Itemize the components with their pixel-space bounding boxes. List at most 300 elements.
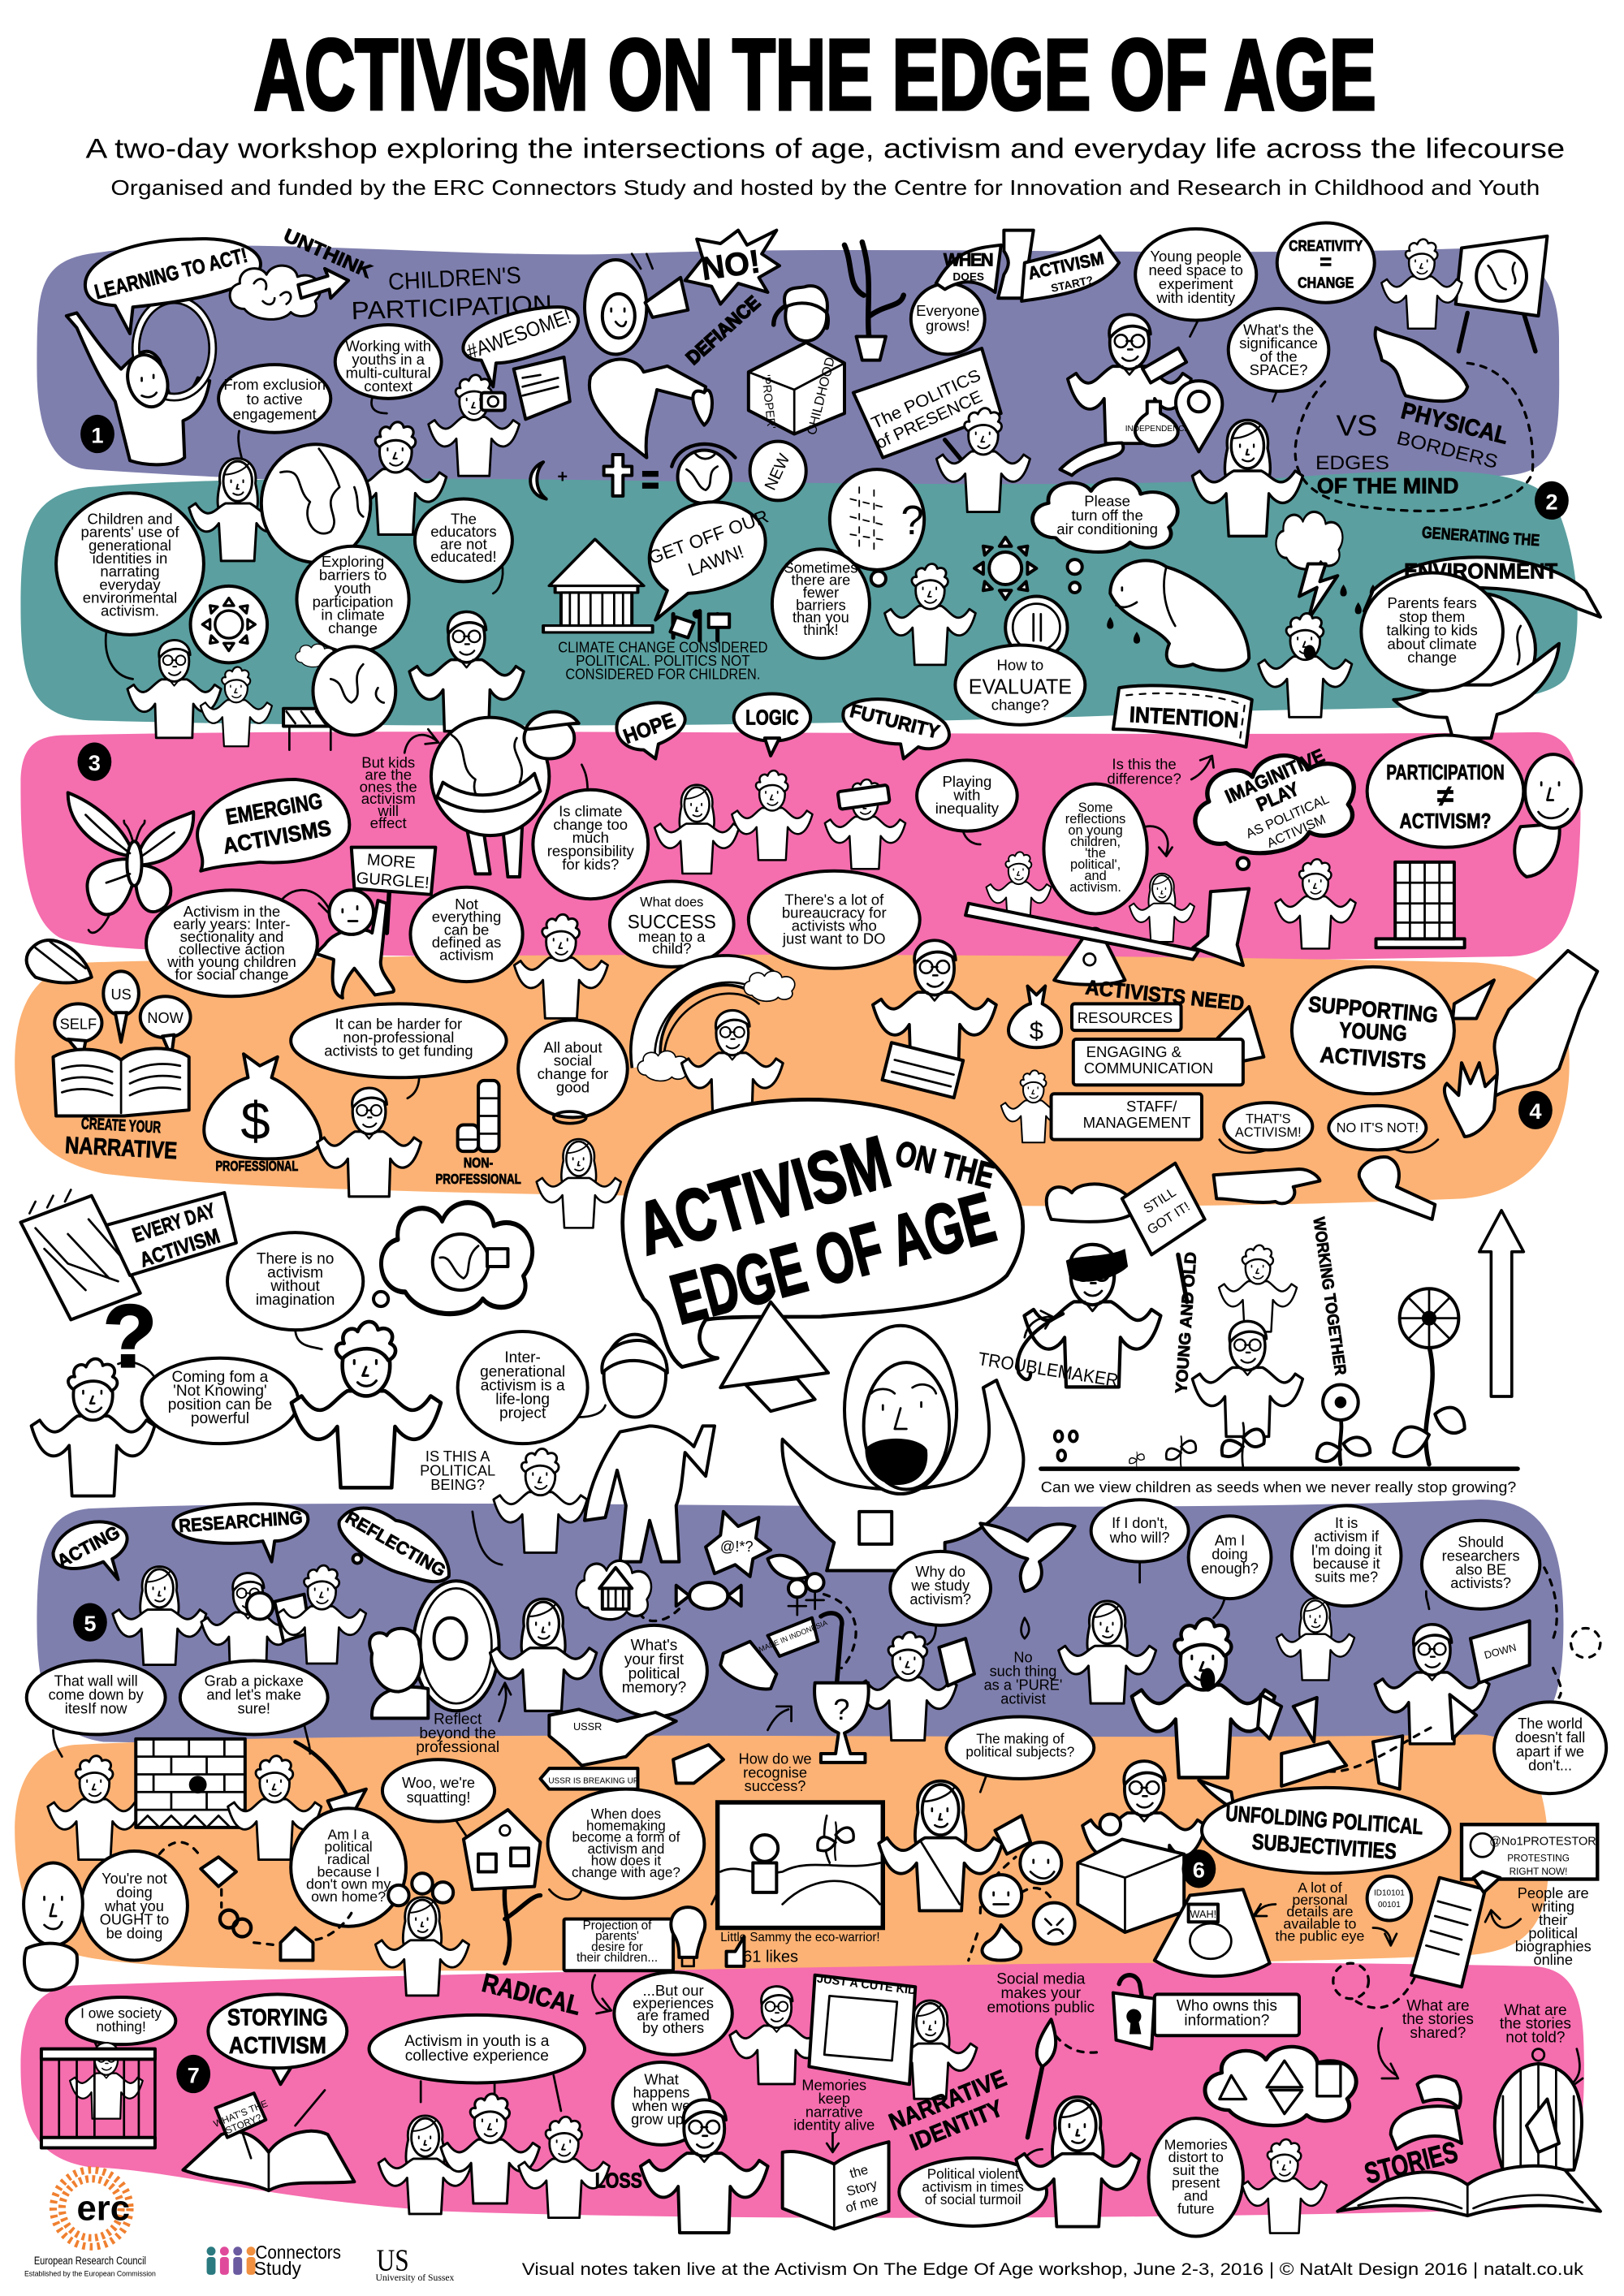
text: lot of personal details: details are [1286, 1904, 1354, 1920]
bubble: when does homemaking: When does [591, 1806, 661, 1822]
icon: money bag [204, 1054, 321, 1159]
bubble: is climate change too much: for kids? [562, 856, 619, 873]
bubble: sometimes fewer barriers: think! [803, 622, 839, 638]
bubble: creativity = change: CHANGE [1298, 275, 1354, 291]
text: is this a political being: BEING? [430, 1477, 485, 1493]
box: engaging and communication: COMMUNICATION [1084, 1060, 1213, 1077]
box: engaging and communication [1073, 1039, 1243, 1085]
bubble: you're not doing: what you [104, 1898, 164, 1914]
bubble: first political memory: your first [624, 1651, 685, 1668]
bubble: children and parents: activism. [101, 602, 159, 619]
logo: european research council: Established by the European Commission [24, 2270, 156, 2278]
bubble: parents fears: talking to kids [1386, 622, 1478, 639]
bubble: educators [415, 499, 512, 593]
picture frame: just a cute kid: JUST A CUTE KID [816, 1973, 917, 1998]
broken globe pieces [1258, 1694, 1476, 1789]
bubble: is climate change too much [533, 765, 648, 899]
bubble: i owe society nothing [67, 1997, 175, 2061]
bubble: playing with inequality: Playing [943, 773, 991, 790]
figure: worried man [1259, 613, 1352, 717]
icon: pointing hand [1214, 1169, 1320, 1203]
bubble: inter-generational: activism is a [481, 1377, 565, 1394]
text: troublemaker [977, 1311, 1120, 1391]
icon: small money bag: $ [1030, 1016, 1043, 1045]
bubble: what happens when we grow up: happens [633, 2085, 689, 2101]
icons: sneaker and tag [720, 1618, 829, 1689]
icon: the story of me book [783, 2133, 889, 2229]
bubble: some reflections: political', [1070, 857, 1121, 872]
bubble: i owe society nothing: nothing! [96, 2018, 146, 2035]
bubble: young people: Young people [1150, 248, 1242, 265]
bubble: should researchers: also BE [1455, 1561, 1506, 1577]
box: resources: RESOURCES [1078, 1009, 1173, 1026]
text: but kids are the ones: activism [361, 790, 416, 807]
icon: house with tree legs [464, 1810, 540, 1963]
figure: older woman with curls [375, 1873, 469, 1996]
logo: university of sussex: University of Sussex [375, 2272, 455, 2283]
icon: the story of me book: Story [845, 2177, 879, 2199]
speech: now: NOW [147, 1010, 184, 1026]
bubble: from exclusion: From exclusion [223, 376, 326, 393]
bubble: creativity = change: CREATIVITY [1289, 238, 1363, 254]
icon: storm cloud [1276, 511, 1376, 620]
figure: person with book [1276, 1599, 1354, 1680]
label: non-professional second line: PROFESSIONAL [435, 1171, 521, 1187]
icon: open book [53, 1048, 189, 1116]
bubble: memories distort: present [1172, 2175, 1220, 2191]
bubble: am i doing enough: doing [1212, 1547, 1248, 1563]
bubble: what does success mean: child? [652, 940, 691, 957]
bubble: parents fears: stop them [1399, 608, 1465, 625]
speech: logic: LOGIC [745, 707, 799, 730]
big speech bubble: activism on the edge of age [623, 1099, 1023, 1367]
bubble: working with youths: multi-cultural [346, 364, 431, 381]
cloud bubble: imaginative play: IMAGINITIVE [1222, 745, 1328, 808]
figure: researcher with sign: DOWN [1483, 1641, 1518, 1661]
figure: boy coming from not knowing [32, 1359, 155, 1496]
bubble: unfolding political subjectivities: UNFOLDING POLITICAL [1224, 1800, 1424, 1839]
label: edges of the mind: OF THE MIND [1317, 473, 1458, 498]
bubble: bureaucracy: activists who [792, 917, 877, 934]
label: generating the: GENERATING THE [1421, 524, 1540, 550]
burst: no: NO! [699, 244, 762, 287]
caption: climate change considered political: CLIMATE CHANGE CONSIDERED [558, 640, 767, 657]
text: social media: Social media [996, 1971, 1086, 1988]
label: young and old: YOUNG AND OLD [1173, 1251, 1200, 1394]
thought bubble: burning globe [374, 1202, 533, 1314]
box: projection of parents' desire: their children... [577, 1951, 658, 1965]
section 5 number: 5 [84, 1611, 96, 1636]
bubble: exploring barriers: change [328, 619, 378, 637]
box: engaging and communication: ENGAGING & [1086, 1043, 1182, 1060]
figure: woman by frame [883, 2000, 977, 2099]
box: projection of parents' desire: desire for [591, 1940, 643, 1954]
text: people are writing: People are [1518, 1885, 1589, 1901]
bubble: why do we study activism: we study [910, 1577, 970, 1594]
bubble: storying activism: STORYING [227, 2005, 328, 2031]
icon: megaphone [1205, 1007, 1263, 1084]
bubble: am i doing enough: Am I [1215, 1533, 1245, 1549]
bubble: what does success mean [610, 881, 734, 967]
icon: money bag: $ [240, 1092, 270, 1151]
text: no such thing as pure activist: No [1013, 1649, 1033, 1665]
bubble: the world doesn't fall apart: don't... [1528, 1757, 1572, 1773]
bubble: parents fears [1361, 572, 1503, 691]
label: children's participation [351, 262, 552, 325]
icon: sun [974, 537, 1036, 599]
bubble: no activism without imagination: activism [267, 1264, 323, 1281]
bubble: political violent activism: of social turmoil [925, 2192, 1021, 2208]
figure: adult and child [127, 640, 272, 746]
bubble: how to evaluate: change? [991, 697, 1049, 714]
label: activists need: ACTIVISTS NEED [1084, 976, 1246, 1016]
banner: every day activism [106, 1193, 236, 1275]
icon: open book with sign: STORY? [224, 2112, 264, 2136]
bubble: memories distort: Memories [1164, 2136, 1228, 2152]
figure: person remembering [1242, 2139, 1327, 2233]
bubble: educators: are not [440, 535, 488, 552]
banner: activism start: START? [1050, 274, 1095, 295]
figure: troublemaker with sunglasses [1017, 1184, 1160, 1387]
label: radical: RADICAL [479, 1967, 584, 2021]
bubble: grab a pickaxe: Grab a pickaxe [205, 1672, 304, 1689]
box: projection of parents' desire: Projection of [583, 1918, 652, 1932]
text: stories shared: the stories [1402, 2011, 1474, 2028]
bubble: emerging activisms: ACTIVISMS [221, 815, 333, 859]
label: professional: PROFESSIONAL [215, 1158, 299, 1174]
cloud bubble: imaginative play: ACTIVISM [1265, 812, 1328, 851]
icon: brain with arrow [230, 265, 348, 319]
footer credit: Visual notes taken live at the Activism On The Edge Of Age workshop, June 2-3, 2016 | © NatAlt Design 2016 | natalt.co.uk [522, 2260, 1584, 2279]
icon: calendar [20, 1189, 140, 1319]
figure: researcher with sign [1375, 1621, 1530, 1744]
label: children's participation: PARTICIPATION [351, 290, 552, 325]
bubble: grab a pickaxe: and let's make [206, 1686, 301, 1703]
bubble: that wall will come down: itesIf now [65, 1701, 127, 1717]
bubble: some reflections: on young [1068, 823, 1123, 838]
big speech bubble: activism on the edge of age: ON THE [892, 1134, 998, 1196]
logo: university of sussex: US [377, 2243, 409, 2277]
cloud bubble: air conditioning: air conditioning [1056, 520, 1158, 537]
burst: censored swear [706, 1512, 771, 1577]
bubble: not knowing: Coming fom a [172, 1369, 269, 1386]
cloud bubble: air conditioning: Please [1084, 493, 1130, 510]
label: narrative identity: NARRATIVE [886, 2065, 1010, 2136]
icon: magnifier [1005, 597, 1081, 694]
logo: european research council: European Research Council [34, 2255, 146, 2267]
bubble: working with youths [335, 325, 442, 413]
speech: hope: HOPE [620, 709, 678, 749]
figure: girl with sign [936, 408, 1030, 512]
text: but kids are the ones: will [377, 802, 399, 819]
bubble: memories distort: suit the [1173, 2162, 1220, 2178]
icon: id badge [1367, 1876, 1411, 1920]
bubble: when does homemaking: activism and [587, 1841, 664, 1857]
bubble: children and parents: parents' use of [81, 524, 179, 541]
icon: peace dove [980, 1523, 1075, 1638]
bubble: inter-generational [458, 1331, 605, 1444]
banner: learning to act: LEARNING TO ACT! [93, 244, 250, 304]
thought icons: building and candy [577, 1560, 741, 1621]
section 4 number: 4 [1529, 1098, 1542, 1124]
box: who owns this information: Who owns this [1177, 1997, 1277, 2014]
text: but kids are the ones: effect [370, 814, 408, 831]
text: no such thing as pure activist: such thing [990, 1663, 1056, 1679]
bubble: no activism without imagination: There is no [257, 1250, 334, 1267]
text: reflect beyond the professional: professional [416, 1739, 499, 1756]
box: resources [1072, 1003, 1181, 1030]
icon: hands holding globe [1393, 593, 1559, 738]
bubble: children and parents: everyday [99, 576, 161, 593]
icons: sneaker and tag: MADE IN INDONESIA [758, 1618, 829, 1654]
picture frame: just a cute kid [809, 1973, 917, 2084]
bubble: if i don't, who will: who will? [1109, 1530, 1170, 1546]
bubble: sometimes fewer barriers: Sometimes [784, 559, 857, 576]
text: lot of personal details: personal [1292, 1892, 1348, 1908]
bubble: activism in youth: Activism in youth is a [404, 2033, 550, 2050]
bubble: woo, we're squatting: Woo, we're [402, 1775, 475, 1791]
icon: coin stacks [458, 1081, 499, 1151]
bubble: not everything: can be [444, 921, 489, 938]
text: how do we recognise success: How do we [739, 1751, 811, 1767]
bubble: exploring barriers [296, 546, 409, 653]
bubble: activism in the early years: early years: Inter- [173, 916, 291, 933]
arrow: to globe [404, 729, 438, 753]
bubble: some reflections: 'the [1085, 846, 1106, 861]
bubble: how to evaluate: EVALUATE [969, 676, 1072, 699]
bubble: participation not activism: ≠ [1437, 779, 1453, 813]
text: stories not told: the stories [1500, 2016, 1571, 2033]
bubble: creativity = change [1277, 223, 1375, 303]
icon: large flower [1393, 1288, 1465, 1465]
bubble: activism in the early years: Activism in the [184, 903, 280, 920]
bubble: supporting young activists [1292, 967, 1494, 1094]
bubble: emerging activisms [197, 779, 349, 871]
bubble: sometimes fewer barriers: barriers [796, 597, 846, 613]
figure: woman with lit match [1016, 2019, 1139, 2227]
bubble: what does success mean: SUCCESS [628, 913, 716, 934]
speech: now [140, 996, 191, 1057]
bubble: working with youths: context [364, 378, 413, 395]
text: but kids are the ones: But kids [361, 753, 415, 770]
figures: three young activists [378, 2094, 610, 2218]
bubble: what's the significance: SPACE? [1250, 361, 1307, 378]
section 7 number: 7 [188, 2062, 200, 2087]
dashed link: to world circle [1544, 1568, 1600, 1698]
label: physical borders: BORDERS [1394, 428, 1500, 473]
bubble: educators: educators [430, 523, 497, 540]
bubble: grab a pickaxe: sure! [238, 1701, 270, 1717]
equation: faith plus globe [530, 442, 806, 503]
text: stories shared [1378, 1997, 1474, 2078]
cloud bubble: imaginative play: AS POLITICAL [1244, 792, 1332, 841]
bubble: when does homemaking: homemaking [586, 1818, 666, 1833]
bubble: all about social change [518, 1020, 628, 1117]
icon: seeds on ground [1041, 1431, 1518, 1469]
figure: person with document [859, 1632, 974, 1741]
icon: scroll [673, 1707, 792, 1783]
speech: self [54, 1003, 102, 1057]
bubble: some reflections: activism. [1069, 880, 1121, 895]
sign: politics of presence: The POLITICS [869, 366, 983, 433]
figure: small child [494, 1448, 587, 1552]
arrow: to baby [274, 890, 337, 915]
burst: no [685, 231, 780, 304]
bubble: sometimes fewer barriers [772, 549, 870, 658]
bubble: children and parents: environmental [83, 589, 177, 606]
bubble: parents fears: Parents fears [1388, 594, 1477, 611]
bubble: activism in youth: collective experience [405, 2048, 549, 2065]
bubble: some reflections: children, [1070, 835, 1121, 849]
sign: still got it: STILL [1141, 1185, 1179, 1216]
text: people are writing: writing [1531, 1899, 1574, 1915]
bubble: should researchers: researchers [1442, 1547, 1520, 1564]
bubble: making of political subjects: political subjects? [965, 1745, 1074, 1760]
bubble: exploring barriers: Exploring [322, 553, 384, 570]
section 2 number: 2 [1545, 489, 1557, 514]
bubble: supporting young activists: YOUNG [1338, 1017, 1408, 1046]
bubble: sometimes fewer barriers: fewer [803, 585, 839, 601]
figure: hope girl [654, 785, 739, 874]
text: stories not told: What are [1504, 2002, 1567, 2019]
figure: child with blocks [1275, 859, 1465, 948]
bubble: awesome [463, 305, 578, 386]
banner: environment [1364, 557, 1600, 617]
tweet box: RIGHT NOW! [1510, 1866, 1567, 1877]
bubble: storying activism [208, 1994, 347, 2084]
bubble: young people: with identity [1155, 289, 1236, 306]
bubble: from exclusion: engagement [233, 405, 317, 422]
icon: barrier, cloud and globe [283, 644, 395, 750]
figure: person with book [514, 914, 608, 1018]
bubble: am i doing enough: enough? [1201, 1560, 1259, 1577]
figure: man with glasses [641, 2100, 768, 2233]
bubble: what happens when we grow up: grow up? [631, 2111, 692, 2127]
figure: woman with megaphone [585, 254, 706, 458]
bubble: political violent activism: activism in times [922, 2179, 1024, 2195]
bubble: am i a political radical [291, 1808, 406, 1927]
text: reflect beyond the professional [416, 1683, 511, 1756]
bubble: harder to get funding: It can be harder for [335, 1015, 462, 1032]
text: memories keep narrative identity alive: identity alive [793, 2117, 875, 2134]
text: no such thing as pure activist: as a 'PURE' [984, 1677, 1062, 1693]
bubble: if i don't, who will [1091, 1500, 1189, 1582]
bubble: memories distort: and [1184, 2188, 1208, 2204]
icon: seedlings [1129, 1423, 1264, 1467]
arrow: to child [473, 1512, 502, 1564]
icon: big open hand [1491, 951, 1597, 1098]
organiser line: Organised and funded by the ERC Connectors Study and hosted by the Centre for Innovation and Research in Childhood and Youth [110, 177, 1540, 200]
figure: open-mouth man [1132, 1619, 1275, 1777]
figure: person remembering [490, 1599, 597, 1711]
thought bubble: fenced idea: ? [901, 497, 924, 543]
bubble: am i a political radical: own home? [311, 1888, 386, 1905]
figure: man holding flask: INDEPENDENCE [1125, 425, 1190, 434]
icon: trophy [814, 1683, 869, 1763]
bubble: is it activism: because it [1313, 1556, 1380, 1572]
bubble: inter-generational: Inter- [504, 1349, 541, 1366]
icon: open book with sign: WHAT'S THE [212, 2098, 270, 2130]
logo: european research council [24, 2170, 156, 2278]
figure: woman shouting [1059, 1601, 1156, 1703]
figure: person pointing up [292, 1322, 441, 1487]
bubble: no activism without imagination: imagination [256, 1292, 335, 1309]
bubble: bureaucracy: There's a lot of [784, 891, 884, 908]
plant in pot [844, 242, 904, 360]
bubble: not knowing: powerful [191, 1410, 249, 1427]
bubble: everyone grows [911, 283, 985, 354]
equation: faith plus globe: NEW [762, 451, 794, 493]
label: narrative identity [886, 2065, 1010, 2156]
label: create your narrative: NARRATIVE [64, 1133, 178, 1164]
text: is this the difference: Is this the [1112, 755, 1177, 772]
bubble: parents fears: about climate [1388, 635, 1477, 652]
box: proper childhood [749, 286, 844, 437]
bubble: supporting young activists: SUPPORTING [1307, 991, 1439, 1028]
bubble: everyone grows: Everyone [916, 302, 979, 319]
sign: more gurgle: MORE [366, 851, 417, 872]
arrow: growth up [1479, 1211, 1523, 1396]
speech: logic [734, 694, 810, 756]
bubble: unfolding political subjectivities: SUBJECTIVITIES [1251, 1828, 1397, 1864]
bubble: not everything: activism [439, 947, 494, 964]
bubble: memories distort [1149, 2118, 1243, 2237]
bubble: some reflections: Some [1078, 801, 1112, 815]
bubble: exploring barriers: barriers to [319, 567, 387, 584]
bubble: emerging activisms: EMERGING [224, 788, 324, 830]
bubble: what's the significance [1229, 309, 1328, 402]
text: people are writing: biographies [1515, 1939, 1592, 1955]
bubble: that wall will come down: come down by [49, 1686, 145, 1703]
figure: shouting protester [782, 1326, 1023, 1571]
bubble: not everything: everything [432, 908, 501, 926]
logo: university of sussex [375, 2243, 455, 2283]
bubble: making of political subjects: The making of [976, 1731, 1065, 1746]
figure: butterfly [68, 792, 193, 914]
sign: still got it [1122, 1163, 1205, 1302]
bubble: but our experiences: ...But our [642, 1982, 704, 1999]
cloud thought: shapes [1205, 2047, 1356, 2126]
label: physical borders [1394, 398, 1510, 473]
tweet box: @No1PROTESTOR [1489, 1836, 1596, 1849]
label: non-professional: NON- [464, 1154, 493, 1171]
bubble: woo, we're squatting [382, 1759, 495, 1836]
burst: censored swear: @!*? [720, 1539, 754, 1555]
bubble: educators: educated! [430, 548, 497, 565]
equation: faith plus globe: + [557, 467, 568, 487]
section 1 number [80, 415, 114, 453]
bubble: inter-generational: life-long [495, 1391, 550, 1408]
banner: every day activism: EVERY DAY [130, 1199, 218, 1247]
box: staff management: STAFF/ [1126, 1098, 1177, 1115]
figure: person looking in mirror [369, 1581, 499, 1718]
text: is this the difference: difference? [1107, 770, 1181, 787]
bubble: the world doesn't fall apart: apart if we [1516, 1743, 1584, 1759]
bubble: participation not activism: PARTICIPATION [1386, 762, 1505, 784]
bubble: no activism without imagination: without [270, 1278, 321, 1295]
figure: rainbow with woman [637, 970, 795, 1116]
figure: painter with globe easel [1381, 236, 1547, 352]
tweet box [1462, 1824, 1597, 1880]
bubble: why do we study activism: activism? [909, 1591, 971, 1608]
bubble: making of political subjects [946, 1717, 1094, 1792]
bubble: exploring barriers: in climate [321, 606, 385, 624]
subtitle: A two-day workshop exploring the intersections of age, activism and everyday life across the lifecourse [85, 134, 1565, 165]
figure: child on shoulders [1192, 1245, 1302, 1436]
band: section 7 pink [20, 1963, 1584, 2218]
figure: woman with politics sash [879, 1781, 1030, 1910]
bubble: when does homemaking: change with age? [572, 1865, 680, 1880]
